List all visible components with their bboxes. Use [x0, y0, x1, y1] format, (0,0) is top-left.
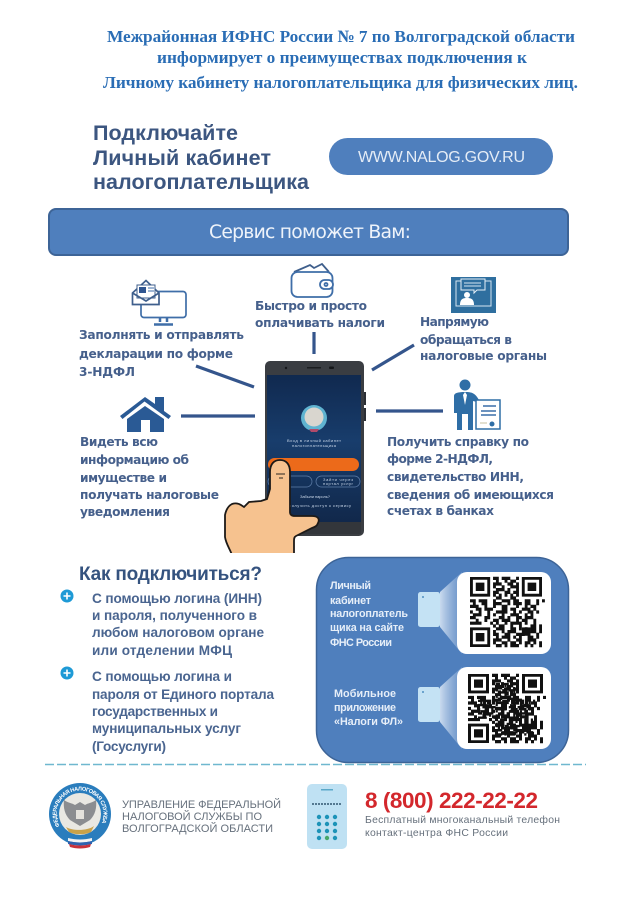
phone with app screen: Зайти через [323, 477, 353, 482]
text: personal account on FNS website: Личный [330, 580, 371, 592]
icon: phone keypad [307, 784, 347, 849]
app login button [268, 458, 359, 471]
heading: connect personal account: Личный кабинет [93, 146, 271, 170]
text: login with INN: и пароля, полученного в [92, 608, 257, 623]
text: mobile app [334, 688, 403, 728]
title: Личному кабинету налогоплательщика для физических лиц. [103, 73, 578, 92]
bullet: plus icon one [60, 590, 74, 602]
text: login with Gosuslugi: муниципальных услуг [92, 721, 241, 736]
text: personal account on FNS website: щика на сайте [330, 622, 404, 634]
text: property information [80, 435, 219, 519]
text: certificates [387, 435, 554, 518]
text: file declarations: декларации по форме [79, 347, 233, 361]
text: free hotline: Бесплатный многоканальный телефон [365, 814, 560, 826]
emblem: federal tax service: ФЕДЕРАЛЬНАЯ НАЛОГОВАЯ СЛУЖБА [52, 786, 108, 827]
phone with app screen [265, 361, 366, 536]
text: login with Gosuslugi: (Госуслуги) [92, 739, 166, 754]
text: file declarations: 3-НДФЛ [79, 365, 135, 379]
text: free hotline [365, 814, 560, 839]
panel: QR codes [316, 558, 568, 762]
beam and card two [418, 667, 462, 749]
phone with app screen: Вход в личный кабинет [287, 438, 341, 443]
text: certificates: счетах в банках [387, 504, 494, 518]
text: pay taxes: оплачивать налоги [255, 316, 385, 330]
text: personal account on FNS website: ФНС России [330, 637, 392, 649]
text: file declarations [79, 328, 244, 379]
phone with app screen: налогоплательщика [292, 443, 337, 448]
heading: connect personal account [93, 121, 310, 194]
QR card one [457, 572, 551, 654]
text: certificates: сведения об имеющихся [387, 488, 554, 502]
heading: connect personal account: налогоплательщика [93, 170, 310, 194]
text: login with INN: любом налоговом органе [92, 625, 264, 640]
arrow: tax authorities to phone [372, 345, 414, 370]
text: pay taxes: Быстро и просто [255, 299, 367, 313]
text: login with Gosuslugi: пароля от Единого портала [92, 687, 274, 702]
heading: connect personal account: Подключайте [93, 121, 238, 145]
text: regional tax department: УПРАВЛЕНИЕ ФЕДЕРАЛЬНОЙ [122, 798, 281, 811]
heading: how to connect: Как подключиться? [79, 564, 262, 585]
beam and card one [418, 572, 462, 654]
icon: man with document [454, 380, 500, 430]
text: personal account on FNS website [330, 580, 408, 649]
text: login with INN: С помощью логина (ИНН) [92, 591, 262, 606]
arrow: pay taxes to phone [312, 332, 316, 354]
website pill [329, 138, 553, 175]
text: mobile app: Мобильное [334, 688, 396, 700]
hand pressing the phone [225, 460, 319, 556]
title: информирует о преимуществах подключения к [157, 48, 527, 67]
arrow: certificates to phone [376, 409, 443, 413]
text: mobile app: приложение [334, 702, 396, 714]
icon: mail and monitor [132, 280, 186, 324]
icon: laptop with consultant [451, 277, 496, 313]
QR card two [457, 667, 551, 749]
icon: wallet [292, 264, 333, 297]
emblem: federal tax service [49, 783, 111, 848]
title [103, 27, 578, 92]
text: property information: Видеть всю [80, 435, 158, 449]
banner: service will help you [49, 209, 568, 255]
text: certificates: свидетельство ИНН, [387, 470, 524, 484]
icon: house [120, 397, 171, 432]
text: regional tax department: ВОЛГОГРАДСКОЙ ОБЛАСТИ [122, 822, 273, 835]
app emblem [301, 405, 327, 432]
bullet: plus icon two [60, 666, 74, 680]
text: personal account on FNS website: кабинет [330, 595, 371, 607]
text: regional tax department [122, 798, 281, 835]
text: login with Gosuslugi [92, 669, 274, 754]
text: property information: уведомления [80, 505, 170, 519]
text: file declarations: Заполнять и отправлять [79, 328, 244, 342]
text: property information: получать налоговые [80, 488, 219, 502]
phone with app screen: Забыли пароль? [300, 494, 331, 499]
arrow: declarations to phone [196, 366, 254, 387]
banner: service will help you: Сервис поможет Вам: [209, 222, 411, 243]
text: free hotline: контакт-центра ФНС России [365, 828, 508, 839]
phone with app screen: получить доступ к сервису [289, 503, 351, 508]
text: contact tax authorities: Напрямую [420, 315, 489, 329]
text: pay taxes [255, 299, 385, 330]
title: Межрайонная ИФНС России № 7 по Волгоградской области [107, 27, 575, 46]
text: contact tax authorities: обращаться в [420, 333, 512, 347]
text: regional tax department: НАЛОГОВОЙ СЛУЖБЫ ПО [122, 810, 262, 823]
text: certificates: Получить справку по [387, 435, 529, 449]
text: property information: имуществе и [80, 471, 167, 485]
text: contact tax authorities [420, 315, 547, 363]
text: certificates: форме 2-НДФЛ, [387, 452, 493, 466]
text: property information: информацию об [80, 453, 189, 467]
website pill: WWW.NALOG.GOV.RU [358, 149, 525, 166]
hotline number: 8 (800) 222-22-22 [365, 788, 538, 813]
text: contact tax authorities: налоговые органы [420, 349, 547, 363]
phone with app screen: портал услуг [323, 481, 354, 486]
text: login with INN: или отделении МФЦ [92, 643, 232, 658]
text: login with Gosuslugi: государственных и [92, 704, 218, 719]
arrow: house to phone [181, 414, 255, 418]
text: personal account on FNS website: налогоплатель [330, 608, 408, 620]
text: mobile app: «Налоги ФЛ» [334, 716, 403, 728]
text: login with INN [92, 591, 264, 658]
text: login with Gosuslugi: С помощью логина и [92, 669, 232, 684]
